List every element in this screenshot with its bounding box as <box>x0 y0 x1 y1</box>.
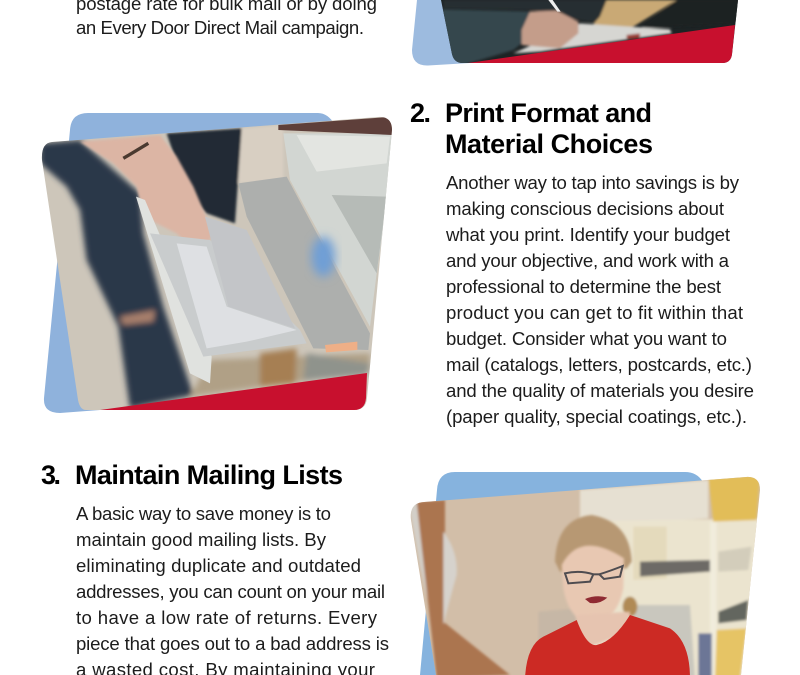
text block: step 2 body: Another way to tap into savings is by <box>446 172 740 193</box>
shape: blue backing <box>412 0 470 66</box>
text block: step 3 body: to have a low rate of returns. Every <box>76 607 378 628</box>
text block: step 2 body: (paper quality, special coatings, etc.). <box>446 406 747 427</box>
text block: step 2 body: and your objective, and work with a <box>446 250 730 271</box>
heading: step 3: Maintain Mailing Lists <box>75 460 343 490</box>
shape: red corner <box>468 25 735 63</box>
text block: step 3 body: addresses, you can count on your mail <box>76 581 385 602</box>
shape: red corner <box>100 373 367 410</box>
text block: step 2 body: what you print. Identify your budget <box>445 224 731 245</box>
shape: blue backing <box>44 113 335 413</box>
text block: step 3 body <box>76 503 389 675</box>
panel: print format photo <box>30 113 397 413</box>
photo: woman at desk <box>400 472 767 675</box>
photo: writing on parcel <box>433 0 743 67</box>
text block: step 3 body: piece that goes out to a bad address is <box>76 633 389 654</box>
panel: mailing lists photo <box>400 472 767 675</box>
text block: step 2 body <box>445 172 754 427</box>
text block: step 2 body: making conscious decisions about <box>446 198 725 219</box>
text block: step 3 body: eliminating duplicate and outdated <box>76 555 361 576</box>
shape: blue backing <box>420 472 703 675</box>
text block: step 1 ending: an Every Door Direct Mail campaign. <box>76 17 364 38</box>
heading: step 2: Material Choices <box>445 129 653 159</box>
text block: step 1 ending <box>76 0 377 38</box>
heading: step 2: 2. <box>410 98 431 128</box>
photo: hand feeding printer tray <box>30 113 397 413</box>
text block: step 3 body: A basic way to save money is to <box>76 503 331 524</box>
text block: step 2 body: budget. Consider what you want to <box>446 328 727 349</box>
text block: step 2 body: product you can get to fit within that <box>446 302 744 323</box>
heading: step 3: 3. <box>41 460 61 490</box>
heading: step 2 <box>410 98 653 159</box>
text block: step 2 body: and the quality of materials you desire <box>446 380 754 401</box>
text block: step 2 body: professional to determine the best <box>446 276 722 297</box>
text block: step 3 body: maintain good mailing lists. By <box>76 529 327 550</box>
photo panel: hand writing on mail <box>412 0 743 67</box>
heading: step 2: Print Format and <box>445 98 652 128</box>
text block: step 2 body: mail (catalogs, letters, postcards, etc.) <box>446 354 752 375</box>
